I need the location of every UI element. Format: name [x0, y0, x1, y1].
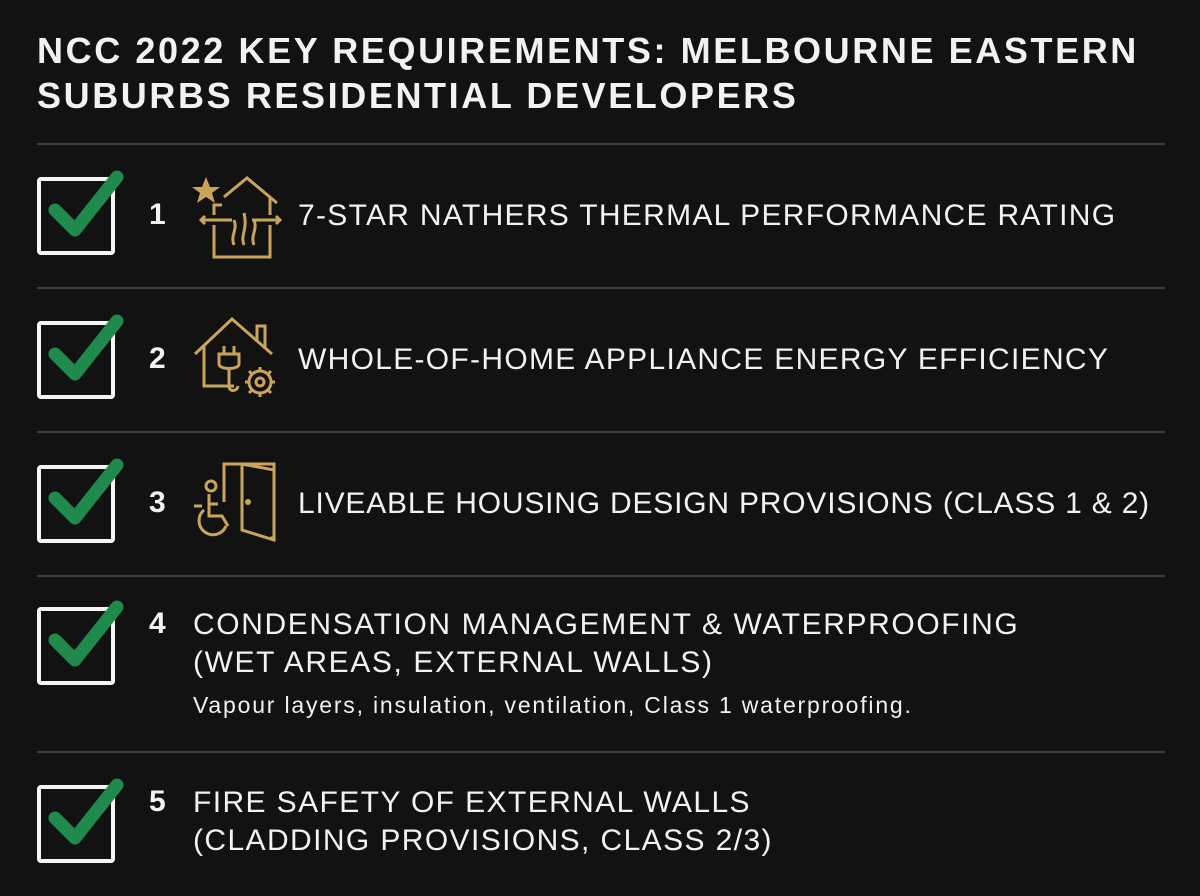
- row 2: [37, 314, 1109, 399]
- icon: house plug gear: [194, 317, 275, 397]
- checkbox 5: [37, 778, 124, 863]
- row 5: 5: [149, 785, 166, 818]
- title: [37, 30, 1139, 116]
- row 5: [37, 778, 773, 863]
- checkbox 2: [37, 314, 124, 399]
- row 2: 2: [149, 342, 166, 375]
- icon: thermal house: [192, 176, 282, 258]
- text 3: LIVEABLE HOUSING DESIGN PROVISIONS (CLASS 1 & 2): [298, 487, 1150, 520]
- text 4: (WET AREAS, EXTERNAL WALLS): [193, 646, 714, 679]
- text 2: WHOLE-OF-HOME APPLIANCE ENERGY EFFICIENCY: [298, 343, 1109, 376]
- row 1: [37, 170, 1116, 258]
- text 5: (CLADDING PROVISIONS, CLASS 2/3): [193, 824, 773, 857]
- row 4: 4: [149, 607, 166, 640]
- text 4: [193, 608, 1019, 718]
- row 1: 1: [149, 198, 166, 231]
- row 3: [37, 458, 1150, 543]
- title: NCC 2022 KEY REQUIREMENTS: MELBOURNE EASTERN: [37, 30, 1139, 71]
- text 4: CONDENSATION MANAGEMENT & WATERPROOFING: [193, 608, 1019, 641]
- title: SUBURBS RESIDENTIAL DEVELOPERS: [37, 75, 798, 116]
- text 1: 7-STAR NATHERS THERMAL PERFORMANCE RATING: [298, 199, 1116, 232]
- text 4: Vapour layers, insulation, ventilation, Class 1 waterproofing.: [193, 692, 913, 718]
- row 3: 3: [149, 486, 166, 519]
- row 4: [37, 600, 1019, 718]
- text 5: [193, 786, 773, 857]
- icon: wheelchair door: [194, 462, 276, 542]
- checkbox 4: [37, 600, 124, 685]
- checkbox 3: [37, 458, 124, 543]
- text 5: FIRE SAFETY OF EXTERNAL WALLS: [193, 786, 751, 819]
- checkbox 1: [37, 170, 124, 255]
